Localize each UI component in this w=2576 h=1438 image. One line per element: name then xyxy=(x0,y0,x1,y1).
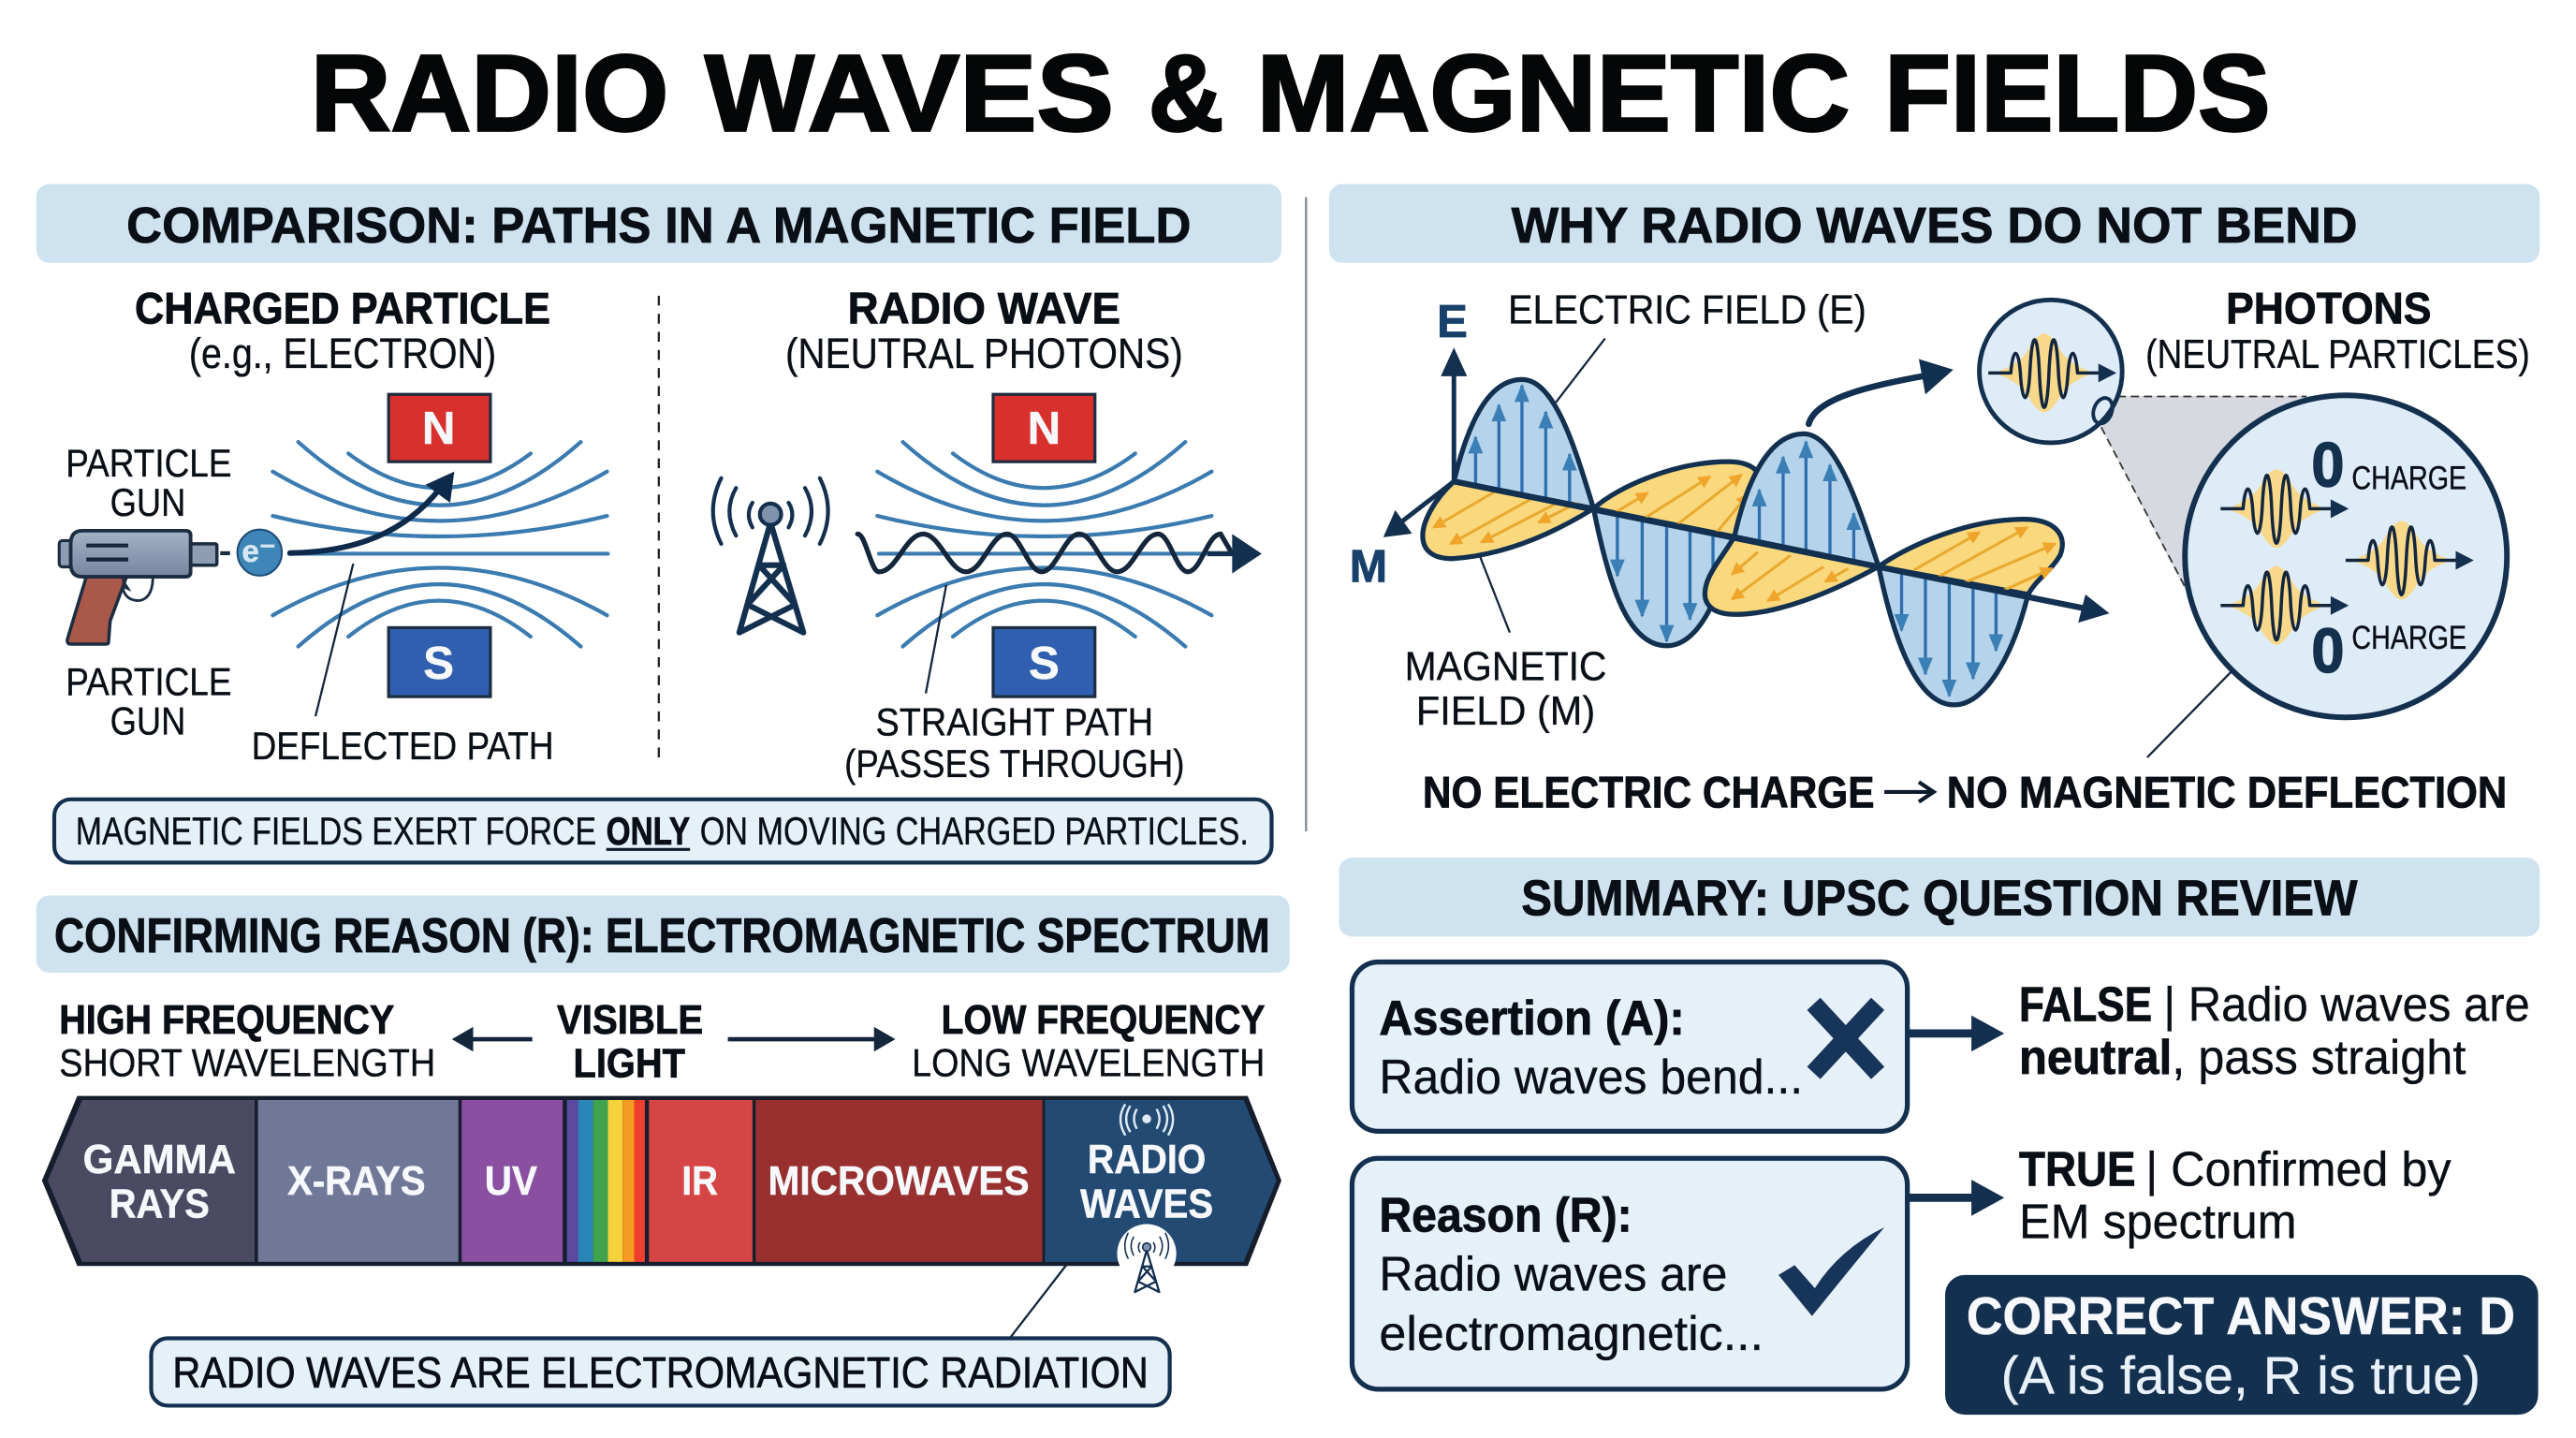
callout: correct answer: (A is false, R is true) xyxy=(2001,1345,2481,1404)
icon: radio tower xyxy=(713,478,828,633)
icon: zoomed photons circle: CHARGE xyxy=(2351,461,2466,497)
verdict: true: EM spectrum xyxy=(2019,1194,2297,1248)
icon: electron xyxy=(238,530,282,576)
label: low frequency xyxy=(912,997,1265,1085)
verdict: true xyxy=(2019,1141,2452,1248)
label: straight path xyxy=(844,699,1184,785)
arrow: assertion to verdict xyxy=(1909,1016,2004,1051)
label: particle gun bottom: PARTICLE xyxy=(66,659,232,703)
heading: why radio waves do not bend: WHY RADIO WAVES DO NOT BEND xyxy=(1512,198,2358,254)
verdict: false: , pass straight xyxy=(2172,1030,2466,1084)
label: straight path: (PASSES THROUGH) xyxy=(844,741,1184,785)
label: particle gun top: PARTICLE xyxy=(66,441,232,485)
label: visible light: LIGHT xyxy=(574,1040,685,1086)
heading: radio wave: (NEUTRAL PHOTONS) xyxy=(785,330,1183,377)
magnet south right: S xyxy=(1029,638,1060,689)
heading: confirming reason: CONFIRMING REASON (R): ELECTROMAGNETIC SPECTRUM xyxy=(54,908,1270,962)
heading: why radio waves do not bend xyxy=(1329,184,2539,263)
title: FIELDS xyxy=(1884,33,2271,154)
segment: x-rays: X-RAYS xyxy=(287,1158,426,1204)
arrow: reason to verdict xyxy=(1909,1180,2004,1216)
label: low frequency: LOW FREQUENCY xyxy=(942,997,1265,1043)
heading: confirming reason xyxy=(37,895,1290,973)
magnet south right xyxy=(993,627,1095,697)
label: magnetic field: MAGNETIC xyxy=(1405,644,1606,690)
magnet north left: N xyxy=(422,404,455,454)
magnet north right xyxy=(993,394,1095,462)
verdict: true: TRUE xyxy=(2019,1141,2136,1196)
arrow: wave to photon xyxy=(1808,359,1954,424)
magnet south left: S xyxy=(423,638,454,689)
arrow: deflected path xyxy=(290,472,454,553)
label: axis M: M xyxy=(1350,541,1387,592)
label: particle gun bottom xyxy=(66,659,232,742)
heading: charged particle: CHARGED PARTICLE xyxy=(135,285,550,334)
magnetic field lines right xyxy=(877,442,1212,647)
label: magnetic field: FIELD (M) xyxy=(1416,688,1595,734)
heading: comparison: COMPARISON: PATHS IN A MAGNETIC FIELD xyxy=(126,198,1191,254)
heading: charged particle: (e.g., ELECTRON) xyxy=(189,330,496,377)
callout: correct answer xyxy=(1945,1275,2539,1415)
label: high frequency xyxy=(59,997,435,1085)
magnet south left xyxy=(388,627,490,697)
callout: radio waves are EM radiation xyxy=(152,1338,1170,1405)
label: straight path: STRAIGHT PATH xyxy=(875,699,1153,743)
heading: comparison xyxy=(37,184,1281,263)
segment: radio waves: WAVES xyxy=(1080,1181,1213,1226)
label: axis E: E xyxy=(1437,297,1468,347)
label: deflected path: DEFLECTED PATH xyxy=(252,724,554,768)
segment: ultraviolet xyxy=(461,1100,563,1262)
card: assertion: Radio waves bend... xyxy=(1379,1049,1803,1104)
panel: comparison of paths in a magnetic field xyxy=(37,184,1281,862)
arrow: toward low frequency xyxy=(728,1027,896,1051)
magnet north left xyxy=(388,394,490,462)
callout: force on moving charges: ONLY xyxy=(607,809,690,853)
verdict: false: neutral xyxy=(2019,1030,2172,1084)
heading: charged particle xyxy=(135,285,550,377)
label: high frequency: HIGH FREQUENCY xyxy=(59,997,394,1043)
title: MAGNETIC xyxy=(1257,33,1850,154)
conclusion: no charge no deflection xyxy=(1423,769,2507,818)
card: assertion xyxy=(1352,962,1908,1131)
icon: zoomed photons circle: CHARGE xyxy=(2351,620,2466,656)
segment: microwaves: MICROWAVES xyxy=(768,1158,1030,1204)
icon: electron: e⁻ xyxy=(242,535,276,569)
panel: why radio waves do not bend xyxy=(1329,184,2539,818)
label: particle gun bottom: GUN xyxy=(110,698,185,742)
arrow: toward high frequency xyxy=(452,1027,533,1051)
conclusion: no charge no deflection: NO ELECTRIC CHARGE xyxy=(1423,769,1875,818)
label: visible light: VISIBLE xyxy=(557,997,703,1043)
icon: cross xyxy=(1814,1004,1878,1073)
label: particle gun top xyxy=(66,441,232,524)
callout: force on moving charges: MAGNETIC FIELDS EXERT FORCE xyxy=(76,809,596,853)
icon: small radio tower badge xyxy=(1117,1224,1177,1292)
callout: radio waves are EM radiation: RADIO WAVES ARE ELECTROMAGNETIC RADIATION xyxy=(172,1348,1149,1397)
callout: force on moving charges: ON MOVING CHARGED PARTICLES. xyxy=(700,809,1249,853)
title: RADIO xyxy=(311,33,668,154)
card: reason: electromagnetic... xyxy=(1379,1306,1764,1360)
segment: radio waves xyxy=(1045,1100,1277,1262)
card: reason: Reason (R): xyxy=(1379,1187,1632,1241)
verdict: false xyxy=(2019,977,2530,1084)
icon: photon circle xyxy=(1980,300,2122,443)
label: low frequency: LONG WAVELENGTH xyxy=(912,1041,1265,1085)
label: particle gun top: GUN xyxy=(110,480,185,524)
verdict: true: | Confirmed by xyxy=(2145,1141,2452,1196)
segment: radio waves: RADIO xyxy=(1088,1137,1206,1182)
title: WAVES xyxy=(705,33,1114,154)
card: reason xyxy=(1352,1158,1908,1389)
label: magnetic field xyxy=(1405,644,1606,734)
segment: microwaves xyxy=(755,1100,1043,1262)
icon: zoomed photons circle: 0 xyxy=(2311,431,2344,500)
arrow: radio wave straight path xyxy=(857,534,1262,574)
segment: infrared xyxy=(649,1100,753,1262)
segment: visible light xyxy=(567,1100,645,1262)
label: high frequency: SHORT WAVELENGTH xyxy=(59,1041,435,1085)
chart: spectrum bar xyxy=(42,1096,1281,1292)
label: visible light xyxy=(557,997,703,1086)
magnetic field lines left xyxy=(272,442,607,647)
segment: gamma rays: RAYS xyxy=(110,1181,210,1226)
magnifier cone xyxy=(2101,396,2317,590)
label: photons xyxy=(2145,285,2530,377)
label: photons: PHOTONS xyxy=(2226,285,2431,334)
conclusion: no charge no deflection: NO MAGNETIC DEFLECTION xyxy=(1947,769,2507,818)
icon: particle gun xyxy=(59,531,230,644)
segment: infrared: IR xyxy=(681,1158,718,1204)
icon: zoomed photons circle: 0 xyxy=(2311,617,2344,686)
panel: electromagnetic spectrum xyxy=(37,895,1290,1405)
magnet north right: N xyxy=(1028,404,1061,454)
card: assertion: Assertion (A): xyxy=(1379,990,1685,1045)
chart: electromagnetic wave xyxy=(1383,347,2110,705)
segment: x-rays xyxy=(258,1100,459,1262)
label: electric field: ELECTRIC FIELD (E) xyxy=(1508,287,1866,333)
heading: radio wave xyxy=(785,285,1183,377)
title: & xyxy=(1149,33,1224,154)
segment: gamma rays xyxy=(48,1100,255,1262)
icon: check mark xyxy=(1778,1227,1884,1316)
callout: force on moving charges xyxy=(54,800,1271,862)
segment: gamma rays: GAMMA xyxy=(83,1137,236,1182)
verdict: false: FALSE xyxy=(2019,977,2152,1032)
title xyxy=(311,33,2271,154)
card: reason: Radio waves are xyxy=(1379,1247,1727,1301)
verdict: false: | Radio waves are xyxy=(2163,977,2530,1032)
heading: radio wave: RADIO WAVE xyxy=(848,285,1120,334)
icon: zoomed photons circle xyxy=(2185,395,2507,717)
segment: ultraviolet: UV xyxy=(485,1158,537,1204)
callout: correct answer: CORRECT ANSWER: D xyxy=(1967,1286,2515,1345)
heading: summary xyxy=(1339,858,2539,936)
panel: summary xyxy=(1339,858,2539,1415)
heading: summary: SUMMARY: UPSC QUESTION REVIEW xyxy=(1521,872,2358,927)
